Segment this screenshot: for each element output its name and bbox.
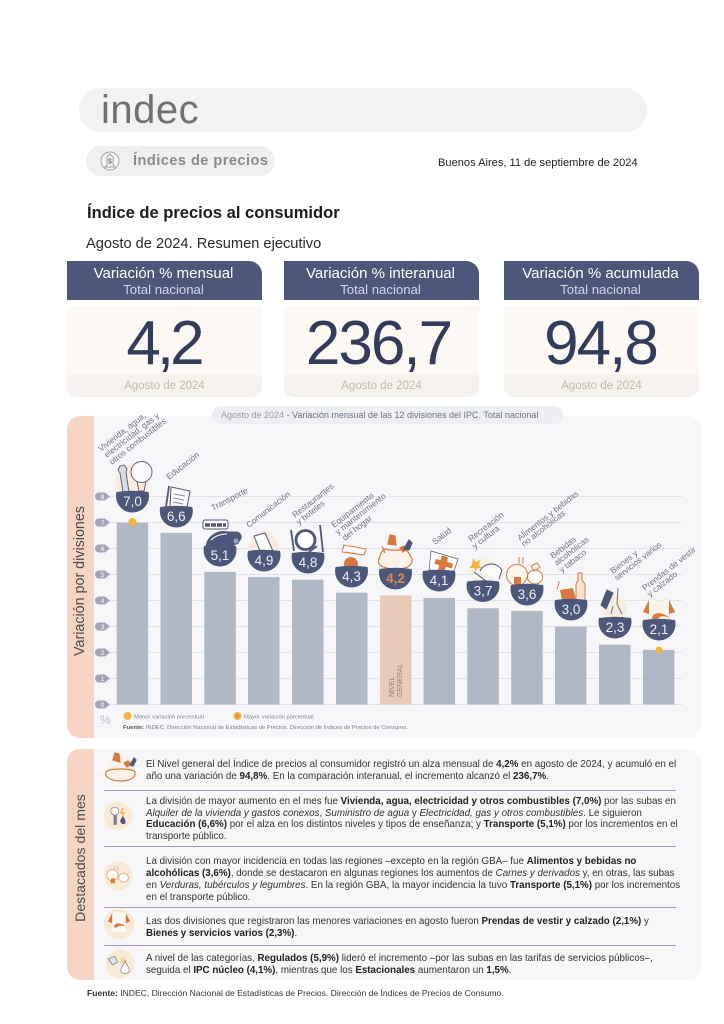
- rotated category labels: no alcohólicas: [519, 508, 567, 549]
- KPI card header: mensual: Variación % mensual: [94, 265, 233, 282]
- rotated category labels: y hoteles: [294, 498, 327, 527]
- y axis markers: 1: [101, 676, 105, 683]
- chart title pill: Agosto de 2024 - Variación mensual de las 12 divisiones del IPC. Total nacional: [221, 410, 538, 420]
- highlight text 4: [146, 916, 649, 939]
- y axis markers: [95, 492, 110, 709]
- rotated category labels: del hogar: [340, 513, 374, 543]
- icon: prendas: [104, 909, 134, 939]
- percent sign: %: [100, 713, 111, 727]
- legend: highest: [234, 712, 314, 720]
- bowl values: [123, 494, 668, 637]
- title: Índice de precios al consumidor: [87, 203, 340, 222]
- source: Fuente: INDEC, Dirección Nacional de Estadísticas de Precios. Dirección de Índices de Precios de Consumo.: [87, 988, 504, 998]
- highlight text 3: [146, 856, 680, 903]
- bowl values: 2,3: [606, 620, 624, 635]
- bowl values: 4,3: [342, 569, 361, 584]
- KPI card header: acumulada: Total nacional: [560, 282, 641, 297]
- section pill: Índices de precios: [86, 146, 275, 176]
- KPI card header: interanual: [284, 261, 479, 300]
- icon: salud, red cross: [429, 551, 458, 573]
- bowl values: 4,1: [430, 573, 448, 588]
- bowl values: 5,1: [211, 548, 229, 563]
- rotated category labels: Vivienda, agua,: [96, 410, 148, 454]
- KPI card header: interanual: Variación % interanual: [306, 265, 455, 282]
- date: Buenos Aires, 11 de septiembre de 2024: [438, 157, 638, 169]
- legend: lowest: [124, 712, 204, 720]
- marker: lowest variation: [656, 646, 662, 654]
- icon: educación, notebook: [166, 486, 190, 507]
- KPI card: acumulada value: 94,8: [544, 309, 657, 378]
- highlight text 2: [146, 796, 678, 842]
- y axis markers: 8: [101, 494, 105, 501]
- rotated category labels: y mantenimiento: [333, 491, 388, 537]
- chart side label: Variación por divisiones: [72, 506, 88, 656]
- highlight text 3: La división con mayor incidencia en todas las regiones –excepto en la región GBA– fue Alimentos y bebidas no: [146, 856, 636, 867]
- icon: vivienda: [104, 802, 132, 830]
- icon: equipamiento, sofa: [342, 545, 366, 571]
- rotated category labels: Prendas de vestir: [640, 544, 698, 593]
- icon: nivel general, basket: [378, 535, 412, 569]
- header band with logo: [79, 88, 647, 132]
- bowl values: 6,6: [167, 509, 186, 524]
- legend: lowest: Menor variación porcentual: [134, 714, 204, 720]
- nivel general bar label: NIVEL: [389, 677, 396, 697]
- rotated category labels: Recreación: [466, 509, 506, 544]
- icon: recreación, umbrella: [469, 556, 502, 584]
- icon: bebidas, bottle and glass: [557, 573, 585, 600]
- icon: prendas, t-shirt: [643, 599, 675, 620]
- icon: categorías, fruit: [106, 950, 134, 978]
- KPI card header: interanual: Total nacional: [340, 282, 421, 297]
- y axis markers: 4: [101, 598, 105, 605]
- bowl values: 3,0: [562, 602, 580, 617]
- rotated category labels: y tabaco: [557, 547, 588, 575]
- KPI card: interanual value: 236,7: [306, 309, 451, 378]
- destacados side band: [67, 749, 94, 980]
- rotated category labels: Bienes y: [608, 547, 640, 576]
- icon: comunicación, phone: [249, 531, 279, 551]
- rotated category labels: Equipamiento: [329, 490, 376, 530]
- highlight text 1: [146, 758, 676, 782]
- highlight text 5: A nivel de las categorías, Regulados (5,9%) lideró el incremento –por las subas en las tarifas de servicios públicos–,: [146, 953, 653, 964]
- y axis markers: 3: [101, 624, 105, 631]
- rotated category labels: [96, 410, 698, 599]
- highlight text 4: Las dos divisiones que registraron las menores variaciones en agosto fueron Prendas de vestir y calzado (2,1%) y: [146, 916, 649, 927]
- icon: price tag: $: [108, 158, 112, 166]
- KPI card header: acumulada: [504, 261, 699, 300]
- highlight text 2: Alquiler de la vivienda y gastos conexos, Suministro de agua y Electricidad, gas y otros combustibles. Le siguieron: [146, 808, 642, 818]
- highlight text 1: El Nivel general del Índice de precios al consumidor registró un alza mensual de 4,2% en agosto de 2024, y acumuló en el: [146, 759, 676, 770]
- value bowls: [116, 491, 675, 641]
- icon: alimentos: [104, 862, 132, 890]
- bowl values: 2,1: [650, 622, 668, 637]
- icon: bienes y servicios, comb and scissors: [601, 588, 627, 620]
- highlight text 2: La división de mayor aumento en el mes fue Vivienda, agua, electricidad y otros combustibles (7,0%) por las subas en: [146, 796, 676, 807]
- KPI card header: mensual: Total nacional: [123, 282, 204, 297]
- rotated category labels: Comunicación: [244, 489, 292, 530]
- icon: transporte, bus and car: [203, 520, 241, 546]
- legend: highest: Mayor variación porcentual: [244, 714, 314, 720]
- bowl values: 3,7: [474, 584, 492, 598]
- bowl values: 4,8: [299, 555, 317, 570]
- KPI card: acumulada value: Agosto de 2024: [561, 380, 642, 392]
- rotated category labels: servicios varios: [612, 539, 663, 583]
- rotated category labels: Restaurantes: [290, 481, 335, 520]
- icon: alimentos, food: [506, 557, 542, 586]
- highlight text 3: en Verduras, tubérculos y legumbres. En la región GBA, la mayor incidencia la tuvo Transporte (5,1%) por los incrementos: [146, 880, 680, 891]
- marker: highest variation: [128, 518, 136, 526]
- highlight text 5: seguida el IPC núcleo (4,1%), mientras que los Estacionales aumentaron un 1,5%.: [146, 965, 511, 976]
- KPI card: interanual value: Agosto de 2024: [341, 380, 422, 392]
- panel: destacados background: [67, 749, 701, 980]
- highlight text 2: transporte público.: [146, 831, 226, 842]
- y axis markers: 6: [101, 546, 105, 553]
- highlight text 1: año una variación de 94,8%. En la comparación interanual, el incremento alcanzó el 236,7%.: [146, 771, 549, 782]
- KPI card: mensual value: 4,2: [126, 309, 201, 378]
- bowl values: 4,2: [386, 571, 405, 586]
- highlight text 3: alcohólicas (3,6%), donde se destacaron en algunas regiones los aumentos de Carnes y derivados y, en otras, las subas: [146, 868, 674, 879]
- rotated category labels: otros combustibles: [107, 416, 168, 467]
- rotated category labels: electricidad, gas y: [102, 410, 162, 460]
- nivel general bar label: GENERAL: [397, 663, 404, 697]
- icon: nivel general: [106, 753, 136, 783]
- icon: restaurantes, plate and cutlery: [291, 525, 323, 552]
- y axis markers: 7: [101, 520, 105, 527]
- rotated category labels: Bebidas: [548, 534, 578, 561]
- panel: chart background: [67, 416, 701, 738]
- KPI card: acumulada value: [504, 306, 699, 397]
- rotated category labels: Salud: [430, 525, 453, 547]
- highlight text 3: en el transporte público.: [146, 892, 250, 903]
- KPI card: interanual value: [284, 306, 479, 397]
- y axis markers: 2: [101, 650, 105, 657]
- subtitle: Agosto de 2024. Resumen ejecutivo: [86, 236, 321, 252]
- highlight text 4: Bienes y servicios varios (2,3%).: [146, 928, 297, 939]
- KPI card: mensual value: [67, 306, 262, 397]
- rotated category labels: alcohólicas: [552, 534, 591, 568]
- icon: vivienda, light bulb: [116, 462, 152, 497]
- bowl values: 7,0: [123, 494, 142, 509]
- highlight text 5: [146, 953, 653, 976]
- icon: price tag: [100, 152, 120, 170]
- KPI card header: acumulada: Variación % acumulada: [522, 265, 679, 282]
- y axis markers: 5: [101, 572, 105, 579]
- chart source: Fuente: INDEC, Dirección Nacional de Estadísticas de Precios. Dirección de Índices de Precios de Consumo.: [123, 724, 408, 731]
- y axis markers: 0: [101, 702, 105, 709]
- bowl values: 3,6: [518, 587, 536, 602]
- KPI card header: mensual: [67, 261, 262, 300]
- rotated category labels: Transporte: [209, 485, 250, 513]
- rotated category labels: Educación: [164, 449, 201, 482]
- KPI card: mensual value: Agosto de 2024: [124, 380, 205, 392]
- rotated category labels: Alimentos y bebidas: [515, 489, 580, 543]
- rotated category labels: y cultura: [470, 523, 501, 551]
- logo: indec: indec: [101, 88, 199, 132]
- chart side band: [67, 416, 94, 738]
- bowl values: 4,9: [255, 553, 273, 568]
- section name: Índices de precios: [133, 153, 268, 169]
- bars: [117, 522, 674, 704]
- rotated category labels: y calzado: [645, 569, 679, 599]
- chart title pill: [212, 406, 563, 424]
- destacados side label: Destacados del mes: [72, 794, 88, 922]
- highlight text 2: Educación (6,6%) por el alza en los distintos niveles y tipos de enseñanza; y Transporte (5,1%) por los incrementos en el: [146, 819, 678, 830]
